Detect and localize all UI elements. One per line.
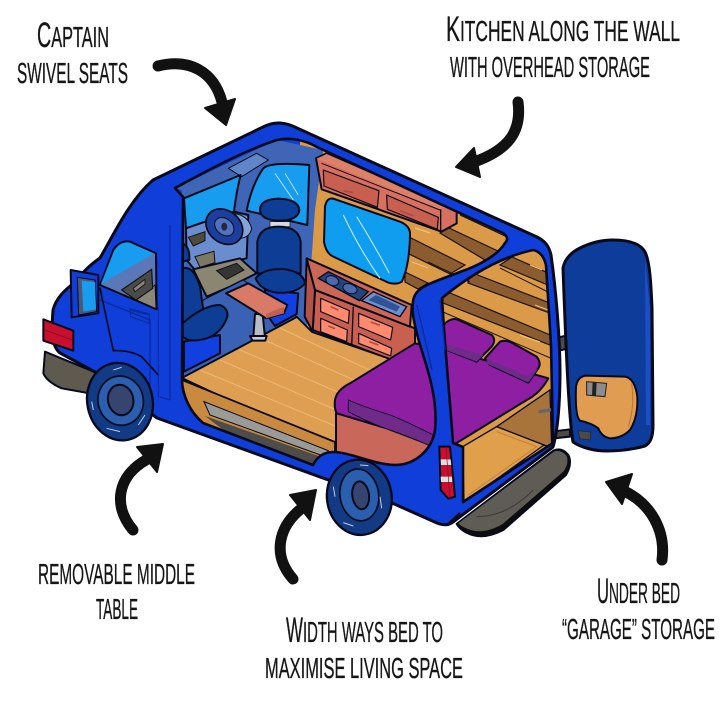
- arrow: to middle table: [120, 444, 163, 530]
- rear door brackets: [552, 335, 570, 439]
- passenger seat: [183, 243, 227, 372]
- bed: [335, 319, 548, 465]
- kitchen unit: [305, 258, 415, 359]
- rear door: [563, 240, 653, 451]
- driver seat: [256, 199, 305, 326]
- arrow: to captain seats: [158, 64, 235, 125]
- arrow: to bed: [280, 490, 316, 579]
- center console: [193, 258, 257, 297]
- wall planks: [405, 227, 555, 347]
- floor: [183, 316, 390, 464]
- front door: [100, 241, 170, 400]
- cab wall: [175, 140, 323, 377]
- body panel lines: [100, 225, 445, 420]
- door window: [100, 241, 157, 309]
- window: [324, 198, 410, 284]
- tail light: [439, 447, 455, 499]
- van body: [52, 123, 560, 525]
- door storage panel: [576, 376, 637, 440]
- step: [204, 402, 328, 467]
- heading: captain swivel seats: SWIVEL SEATS: [17, 58, 128, 90]
- interior: [175, 130, 572, 503]
- rear bumper: [457, 449, 570, 536]
- heading: width ways bed: [265, 611, 463, 685]
- rear wheel: [322, 456, 397, 539]
- side window: [247, 164, 309, 225]
- heading: captain swivel seats: CAPTAIN: [37, 16, 109, 55]
- wood wall: [300, 142, 552, 460]
- drawers: [321, 298, 349, 323]
- mirror: [71, 270, 98, 317]
- headlight: [43, 319, 73, 351]
- heading: removable middle table: REMOVABLE MIDDLE: [38, 559, 195, 591]
- heading: width ways bed: MAXIMISE LIVING SPACE: [265, 653, 463, 685]
- radio: [195, 251, 215, 267]
- van illustration: [43, 123, 653, 539]
- front wheel: [80, 357, 160, 447]
- heading: under bed garage storage: [562, 572, 715, 646]
- heading: removable middle table: [38, 559, 195, 626]
- arrow: to kitchen: [456, 102, 519, 177]
- windscreen: [184, 175, 241, 228]
- heading: captain swivel seats: [17, 16, 128, 90]
- van bottom sill: [392, 503, 460, 525]
- front bumper: [43, 352, 102, 394]
- pillows: [443, 319, 494, 362]
- steering wheel: [205, 208, 244, 246]
- rear garage: [463, 388, 552, 500]
- cowl: [233, 213, 252, 238]
- opening outlines: [175, 139, 553, 502]
- heading: kitchen along the wall: [446, 10, 680, 84]
- sun visor: [228, 153, 268, 177]
- heading: removable middle table: TABLE: [96, 594, 138, 626]
- arrow: to garage: [606, 474, 663, 560]
- heading: width ways bed: WIDTH WAYS BED TO: [286, 611, 443, 650]
- dashboard: [186, 212, 248, 270]
- vent: [188, 232, 205, 246]
- table: [226, 283, 287, 341]
- cab floor: [183, 280, 297, 377]
- sink and hob: [318, 272, 368, 301]
- upper cabinets: [316, 153, 457, 284]
- wheel arch line: [100, 288, 158, 375]
